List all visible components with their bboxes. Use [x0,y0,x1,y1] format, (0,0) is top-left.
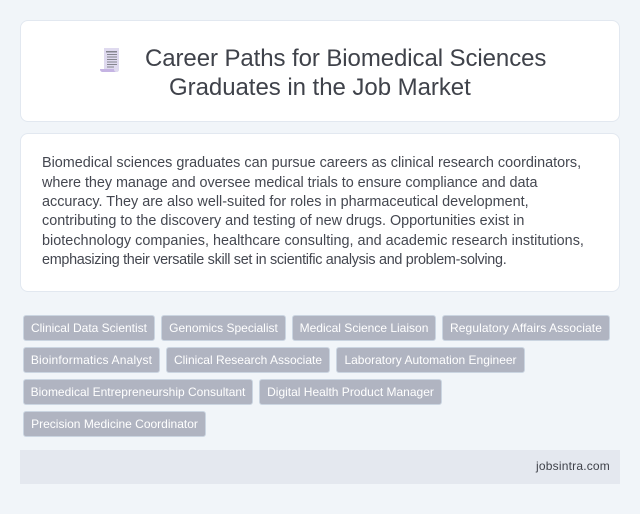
tag [23,315,155,341]
description text: Biomedical sciences graduates can pursue careers as clinical research coordinators, [42,155,581,171]
panel: description [20,133,620,292]
tag: Clinical Data Scientist [31,321,147,335]
tag: Regulatory Affairs Associate [450,321,602,335]
tag: Medical Science Liaison [300,321,428,335]
description text: biotechnology companies, healthcare consulting, and academic research institutions, [42,233,584,249]
tag [161,315,286,341]
description text: contributing to the discovery and testing of new drugs. Opportunities exist in [42,213,524,229]
tag: Digital Health Product Manager [267,385,434,399]
tag: Bioinformatics Analyst [31,353,152,367]
tag [23,379,253,405]
tag [259,379,442,405]
tag: Precision Medicine Coordinator [31,417,198,431]
description text: where they manage and oversee medical trials to ensure compliance and data [42,175,537,191]
tag [23,411,206,437]
title [145,45,546,101]
description text: emphasizing their versatile skill set in scientific analysis and problem-solving. [42,252,506,268]
tag [166,347,330,373]
tag [442,315,610,341]
tag [23,347,160,373]
tag: Clinical Research Associate [174,353,322,367]
tag [336,347,525,373]
title: Graduates in the Job Market [169,74,471,101]
icon: document scroll [100,48,119,72]
tag: Biomedical Entrepreneurship Consultant [31,385,245,399]
tag: Genomics Specialist [169,321,278,335]
description text: accuracy. They are also well-suited for roles in pharmaceutical development, [42,194,529,210]
tag [292,315,436,341]
panel: career tags [23,315,610,437]
title: Career Paths for Biomedical Sciences [145,45,546,72]
panel: title card [20,20,620,122]
footer bar [20,450,620,484]
description text [42,155,584,268]
tag: Laboratory Automation Engineer [344,353,517,367]
footer text: jobsintra.com [536,459,610,473]
